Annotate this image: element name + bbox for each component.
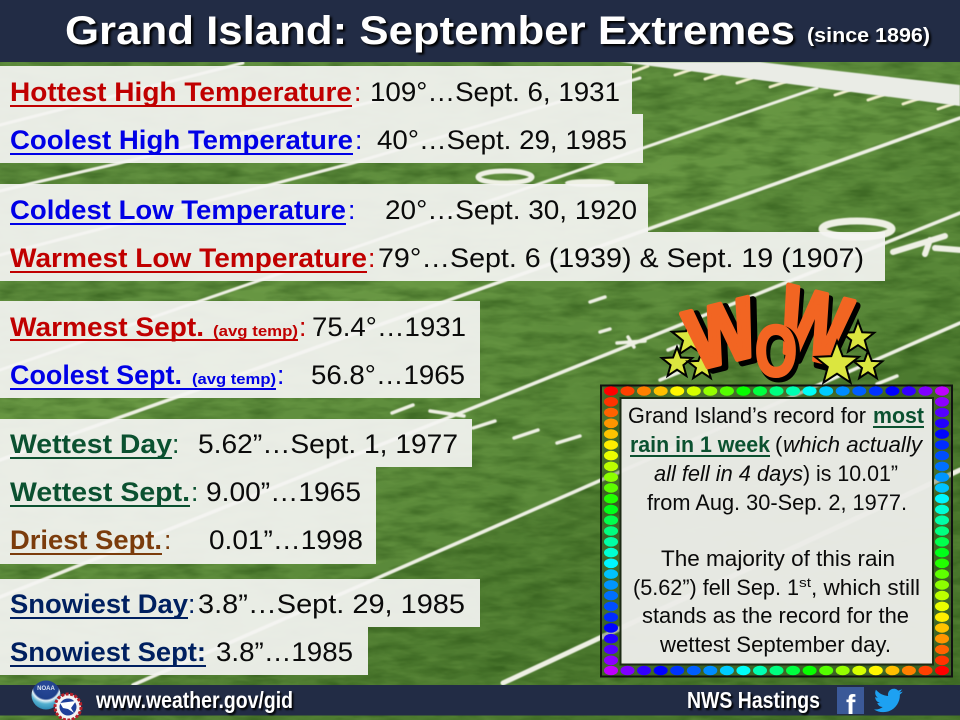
panel: hottest high: : [354,77,361,107]
panel: coolest high: 40°…Sept. 29, 1985 [377,125,627,155]
icon: WOW burst with stars: W [767,266,860,387]
panel: warmest and coolest September: 56.8°…1965 [311,360,465,390]
panel: warmest low: Warmest Low Temperature [10,243,367,273]
panel: snowiest day: Snowiest Day [10,589,188,619]
panel: wettest September: : [191,477,198,507]
icon: WOW burst with stars [662,266,882,395]
panel: snowiest day: : [188,589,195,619]
title: Grand Island: September Extremes [65,9,795,53]
rainbow dot border [604,386,949,675]
panel: driest September: Driest Sept. [10,525,162,555]
paragraph: majority of rain: stands as the record for the [642,603,909,628]
panel: snowiest day: 3.8”…Sept. 29, 1985 [198,589,465,619]
panel: warmest low [0,232,885,281]
panel: driest September: : [164,525,171,555]
panel: coolest high [0,114,643,163]
panel: driest September [0,515,376,564]
panel: snowiest day [0,579,480,627]
panel: snowiest September: 3.8”…1985 [216,637,353,667]
paragraph: record rain: rain in 1 week [630,432,771,457]
panel: warmest and coolest September: (avg temp) [192,371,276,388]
paragraph: record rain: from Aug. 30-Sep. 2, 1977. [647,490,907,515]
since note: (since 1896) [807,25,930,47]
icon: WOW burst with stars: O [758,315,800,395]
panel: wettest day [0,419,472,467]
icon: Twitter [874,689,903,712]
office name: NWS Hastings [687,687,820,713]
panel: coldest low: : [348,195,355,225]
icon: WOW burst with stars: W [677,280,767,388]
paragraph: majority of rain: The majority of this rain [661,546,895,571]
footer bar [0,685,960,716]
panel: coldest low: 20°…Sept. 30, 1920 [385,195,637,225]
panel: warmest and coolest September: : [299,312,306,342]
paragraph: record rain: ( [775,432,783,457]
panel: warmest and coolest September: : [277,360,284,390]
paragraph: majority of rain: (5.62”) fell Sep. 1 [633,575,799,600]
icon: WOW burst with stars: O [755,312,797,392]
website: www.weather.gov/gid [95,687,293,713]
inner text panel [620,398,933,664]
icon: Facebook [837,687,864,720]
panel: snowiest September: Snowiest Sept: [10,637,206,667]
panel: coldest low: Coldest Low Temperature [10,195,346,225]
panel: coolest high: : [355,125,362,155]
panel: warmest and coolest September: (avg temp) [213,323,298,340]
panel: hottest high: 109°…Sept. 6, 1931 [370,77,620,107]
panel: wettest September: 9.00”…1965 [206,477,361,507]
icon: WOW burst with stars: W [770,271,863,391]
paragraph: record rain: most [873,403,925,428]
paragraph: majority of rain [633,546,920,657]
panel: warmest and coolest September [0,301,480,398]
icon: Facebook: f [846,689,856,720]
panel: hottest high: Hottest High Temperature [10,77,352,107]
title banner [0,0,960,62]
panel: wettest September: Wettest Sept. [10,477,190,507]
panel: warmest low: 79°…Sept. 6 (1939) & Sept. 19 (1907) [378,243,864,273]
icon: NOAA logo [32,680,60,710]
panel: snowiest September [0,627,368,675]
callout: record rain box with rainbow border [601,386,952,676]
panel: wettest September [0,467,376,515]
paragraph: record rain [628,403,925,515]
panel: driest September: 0.01”…1998 [209,525,363,555]
icon: WOW burst with stars: W [682,282,772,390]
panel: warmest and coolest September: Warmest Sept. [10,312,204,342]
paragraph: record rain: all fell in 4 days [654,461,803,486]
icon: NWS logo [55,694,81,720]
panel: warmest and coolest September: 75.4°…1931 [312,312,466,342]
panel: wettest day: 5.62”…Sept. 1, 1977 [198,429,458,459]
panel: coldest low [0,184,648,232]
panel: wettest day: Wettest Day [10,429,172,459]
panel: coolest high: Coolest High Temperature [10,125,353,155]
icon: NOAA logo: NOAA [37,686,55,692]
panel: warmest low: : [368,243,375,273]
panel: warmest and coolest September: Coolest Sept. [10,360,182,390]
panel: hottest high [0,66,632,114]
paragraph: record rain: Grand Island’s record for [628,403,866,428]
paragraph: record rain: ) is 10.01” [803,461,898,486]
paragraph: record rain: which actually [783,432,924,457]
paragraph: majority of rain: , which still [811,575,920,600]
panel: wettest day: : [172,429,179,459]
paragraph: majority of rain: st [799,575,811,590]
paragraph: majority of rain: wettest September day. [659,632,891,657]
